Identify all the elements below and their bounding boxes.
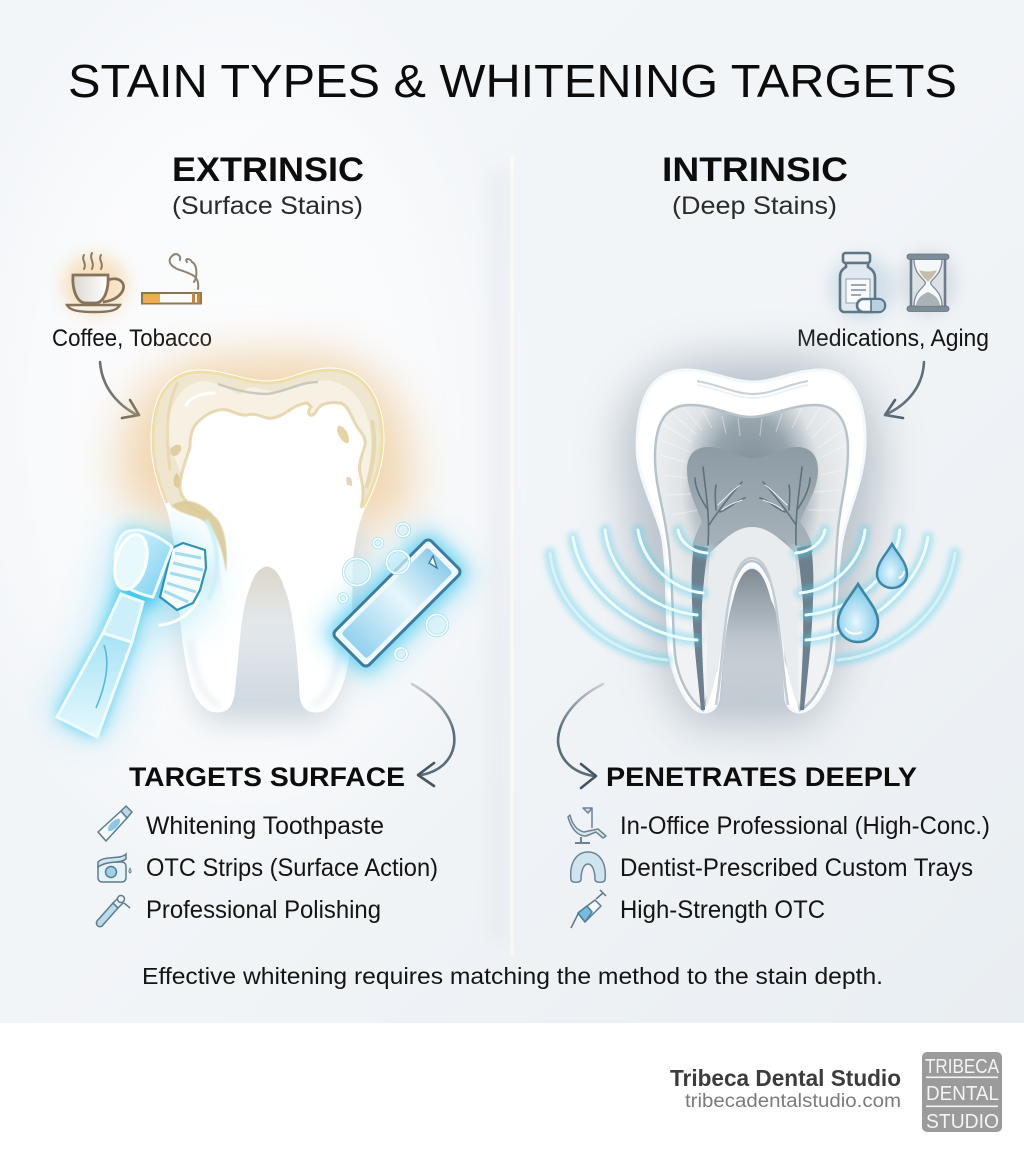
label: high-strength OTC: High-Strength OTC (620, 896, 825, 924)
nerve branches (695, 467, 810, 545)
title: STAIN TYPES & WHITENING TARGETS (68, 55, 957, 107)
takeaway text: Effective whitening requires matching the method to the stain depth. (142, 963, 883, 989)
bristles (160, 543, 206, 610)
root canals (692, 545, 708, 710)
brush head (115, 530, 172, 597)
heading: intrinsic: INTRINSIC (662, 151, 848, 189)
label: medications, aging: Medications, Aging (797, 325, 989, 352)
tooth body (153, 370, 382, 710)
center divider (488, 155, 514, 955)
heading: extrinsic: (Surface Stains) (172, 192, 363, 220)
label: professional polishing: Professional Polishing (146, 896, 381, 924)
footer logo: STUDIO (926, 1111, 999, 1133)
arrow: extrinsic tooth to targets surface (412, 684, 454, 786)
gap between roots (721, 569, 784, 705)
label: in-office professional: In-Office Professional (High-Conc.) (620, 812, 990, 840)
icon: polishing handpiece (96, 896, 130, 927)
footer logo: DENTAL (926, 1083, 999, 1105)
footer logo (922, 1052, 1002, 1133)
dentin (655, 405, 848, 710)
arrow: medications to tooth (885, 362, 924, 418)
surface stain (154, 372, 380, 588)
icon: syringe (571, 890, 606, 928)
label: whitening toothpaste: Whitening Toothpaste (146, 812, 384, 840)
heading: penetrates deeply: PENETRATES DEEPLY (606, 762, 917, 792)
whitening strip with bubbles (316, 522, 478, 684)
heading: intrinsic: (Deep Stains) (672, 192, 837, 220)
cervical enamel highlight (697, 381, 808, 394)
extrinsic tooth illustration (119, 353, 411, 722)
label: OTC strips: OTC Strips (Surface Action) (146, 854, 438, 882)
root dentin band (706, 527, 799, 708)
intrinsic tooth illustration (550, 357, 955, 725)
pulp chamber (687, 447, 818, 552)
icon: OTC strips box (98, 854, 131, 882)
dentin tubule lines (660, 408, 846, 515)
label: coffee, tobacco: Coffee, Tobacco (52, 325, 212, 352)
footer brand text: Tribeca Dental Studio (670, 1065, 901, 1091)
arrow: coffee to tooth (100, 362, 139, 418)
arrow: intrinsic tooth to penetrates deeply (558, 684, 603, 788)
warm stain glow (119, 353, 411, 536)
icon: dental chair (568, 808, 606, 843)
heading: extrinsic: EXTRINSIC (172, 151, 364, 189)
icon: custom tray (571, 852, 605, 882)
icon: coffee cup (63, 253, 127, 315)
whitening gel drops (838, 544, 907, 642)
panel: penetrates deeply (568, 762, 990, 928)
grey depth glow (620, 357, 880, 725)
icon: cigarette (142, 254, 201, 304)
heading: extrinsic (172, 151, 364, 220)
label: custom trays: Dentist-Prescribed Custom Trays (620, 854, 973, 882)
icon: medication bottle (830, 253, 894, 320)
electric toothbrush (50, 520, 217, 737)
panel: targets surface (96, 762, 438, 927)
footer brand text: tribecadentalstudio.com (685, 1091, 901, 1112)
gap between roots (235, 567, 299, 700)
enamel outer (637, 370, 865, 712)
penetration waves (550, 530, 955, 660)
icon: hourglass (900, 251, 956, 315)
footer brand text (670, 1065, 901, 1112)
cool shadow under roots (170, 530, 365, 722)
heading: targets surface: TARGETS SURFACE (129, 762, 405, 792)
icon: toothpaste (98, 806, 132, 841)
footer logo: TRIBECA (925, 1056, 1000, 1078)
heading: intrinsic (662, 151, 848, 220)
root interior shading (190, 552, 340, 705)
